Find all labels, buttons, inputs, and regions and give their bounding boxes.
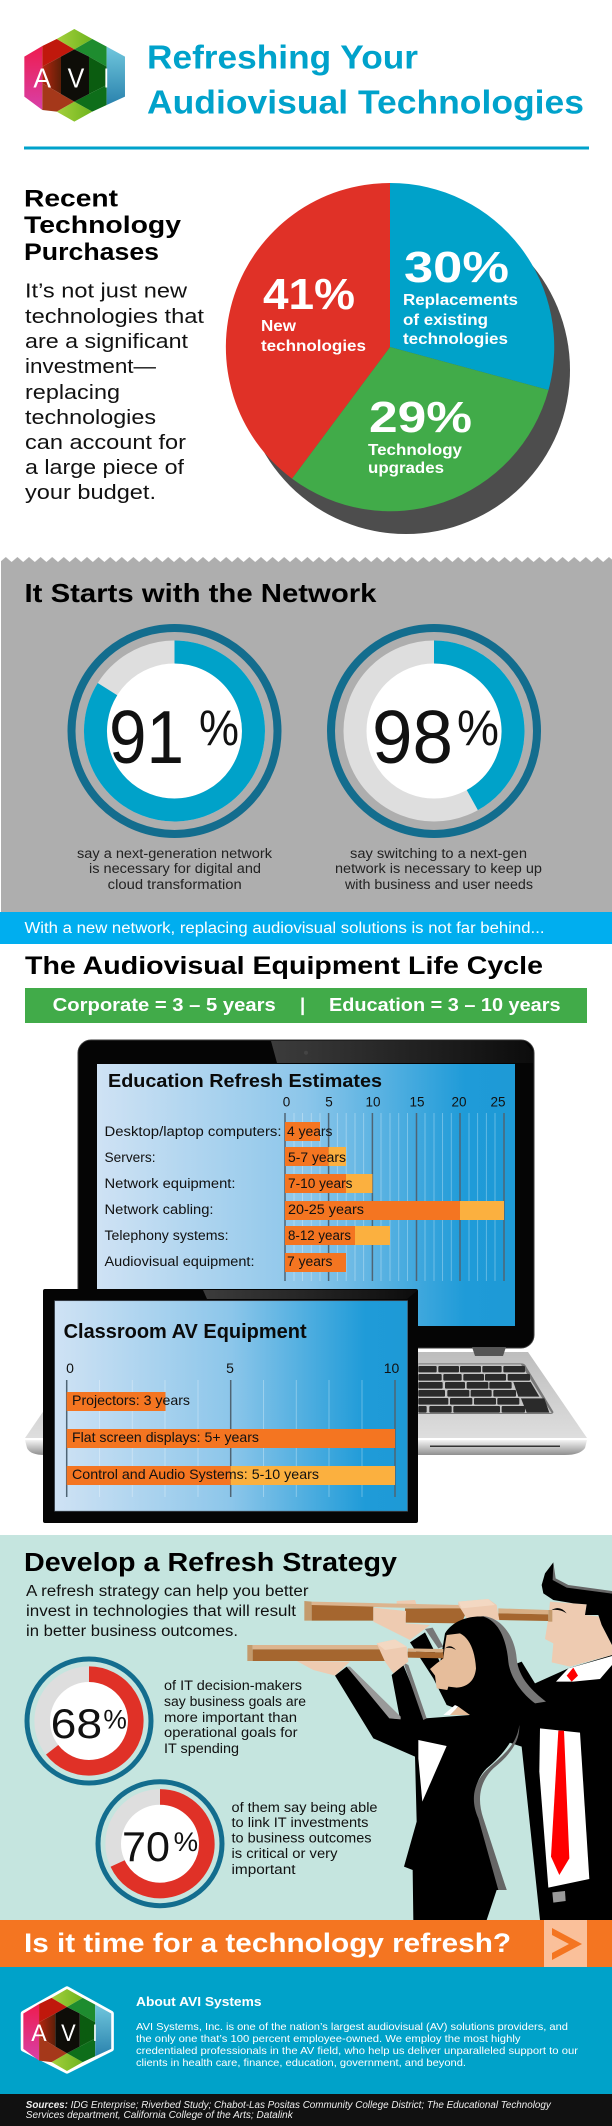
pie label: 29%: Technology bbox=[368, 442, 462, 459]
pie label: 30%: Replacements bbox=[403, 292, 518, 309]
life cycle bar: Corporate = 3 – 5 years bbox=[53, 994, 276, 1015]
text: 68%: more important than bbox=[164, 1710, 297, 1725]
chart bar labels bbox=[72, 1392, 319, 1482]
lower telescope bbox=[247, 1639, 443, 1676]
caption: 91%: say a next-generation network bbox=[77, 846, 272, 861]
chart row labels: Network cabling: bbox=[104, 1202, 214, 1217]
text: 68%: operational goals for bbox=[164, 1725, 298, 1740]
about text: credentialed professionals in the AV field, who help us deliver unparalleled support to our bbox=[136, 2045, 579, 2057]
chart bars bbox=[285, 1122, 504, 1272]
pie label: 30%: technologies bbox=[403, 331, 508, 348]
logo: AVI hexagon with white outline: A bbox=[31, 2020, 47, 2047]
caption: 98% bbox=[335, 846, 542, 892]
chart axis: 0 bbox=[283, 1094, 290, 1110]
about text: the only one that’s 100 percent employee-owned. We employ the most highly bbox=[136, 2033, 521, 2045]
text: 70%: to link IT investments bbox=[232, 1815, 369, 1830]
title bbox=[147, 40, 584, 122]
text: 68%: say business goals are bbox=[164, 1694, 306, 1709]
text: 70%: is critical or very bbox=[232, 1846, 338, 1861]
chart row labels: Network equipment: bbox=[104, 1176, 236, 1191]
tablet bbox=[43, 1289, 418, 1523]
tablet screen bbox=[55, 1301, 408, 1511]
chart axis: 10 bbox=[365, 1094, 381, 1110]
text block: are a significant bbox=[25, 331, 189, 353]
text block: invest in technologies that will result bbox=[26, 1603, 297, 1620]
life cycle bar bbox=[25, 988, 587, 1023]
arrow button bbox=[544, 1920, 587, 1967]
text: 70%: important bbox=[232, 1862, 296, 1877]
heading bbox=[24, 186, 182, 266]
chart axis: 25 bbox=[490, 1094, 506, 1110]
header bbox=[24, 29, 584, 122]
chart axis: 5 bbox=[226, 1360, 234, 1376]
pie label: 29%: 29% bbox=[369, 393, 472, 442]
chart row labels: Servers: bbox=[104, 1150, 156, 1165]
caption: 91%: cloud transformation bbox=[108, 877, 242, 892]
chart axis bbox=[283, 1094, 506, 1110]
donut chart: 91%: % bbox=[199, 700, 239, 756]
heading: It Starts with the Network bbox=[24, 578, 377, 608]
laptop screen bbox=[97, 1064, 515, 1326]
panel: develop a refresh strategy bbox=[0, 1535, 612, 1920]
title: Refreshing Your bbox=[147, 40, 418, 76]
banner: new network bbox=[0, 912, 612, 944]
donut chart: 98% bbox=[331, 628, 537, 834]
text block: in better business outcomes. bbox=[26, 1623, 238, 1640]
heading: Purchases bbox=[24, 239, 159, 266]
donut chart: 68% bbox=[27, 1659, 151, 1783]
text: 68%: IT spending bbox=[164, 1741, 239, 1756]
chart row labels: Desktop/laptop computers: bbox=[104, 1124, 282, 1139]
call to action banner bbox=[0, 1920, 612, 1967]
text block: technologies that bbox=[25, 306, 205, 328]
upper telescope bbox=[304, 1599, 552, 1640]
title: Audiovisual Technologies bbox=[147, 84, 584, 122]
caption: 91% bbox=[77, 846, 272, 892]
heading: Recent bbox=[24, 186, 118, 212]
keyboard bbox=[418, 1363, 553, 1414]
chart axis: 0 bbox=[66, 1360, 74, 1376]
chart title: Classroom AV Equipment bbox=[64, 1321, 307, 1343]
text block: technologies bbox=[25, 407, 156, 429]
man bbox=[410, 1562, 612, 1920]
chart row labels: Audiovisual equipment: bbox=[104, 1254, 254, 1269]
about text bbox=[136, 2021, 579, 2069]
laptop lid bbox=[78, 1040, 534, 1348]
life cycle bar: | bbox=[300, 994, 305, 1015]
pie label: 41%: New bbox=[261, 318, 297, 335]
about heading: About AVI Systems bbox=[136, 1994, 262, 2009]
life cycle bar: Education = 3 – 10 years bbox=[329, 994, 560, 1015]
laptop bbox=[25, 1040, 587, 1455]
logo: AVI hexagon bbox=[24, 29, 125, 122]
chart bar labels: Projectors: 3 years bbox=[72, 1392, 190, 1408]
about text: clients in health care, finance, education, government, and beyond. bbox=[136, 2057, 466, 2069]
text: 70%: to business outcomes bbox=[232, 1830, 372, 1846]
text: 70% bbox=[232, 1800, 378, 1877]
pie label: 30%: of existing bbox=[403, 312, 488, 329]
chart row labels: 8-12 years bbox=[288, 1228, 351, 1243]
pie label: 41% bbox=[261, 270, 366, 355]
logo: AVI hexagon: I bbox=[104, 63, 109, 94]
pie label: 41%: 41% bbox=[263, 270, 355, 319]
chart axis bbox=[66, 1360, 399, 1376]
about text: AVI Systems, Inc. is one of the nation’s largest audiovisual (AV) solutions providers, and bbox=[136, 2021, 568, 2033]
logo: AVI hexagon with white outline: I bbox=[93, 2020, 97, 2047]
sources bar bbox=[0, 2094, 612, 2126]
caption: 98%: network is necessary to keep up bbox=[335, 861, 542, 876]
text block: a large piece of bbox=[25, 457, 185, 479]
chart row labels: 7 years bbox=[287, 1254, 333, 1269]
text block: can account for bbox=[25, 432, 186, 454]
pie label: 30% bbox=[403, 243, 518, 348]
donut chart: 98%: % bbox=[457, 700, 499, 756]
logo: AVI hexagon with white outline: V bbox=[61, 2020, 76, 2047]
text block: your budget. bbox=[25, 482, 156, 504]
text: 68%: of IT decision-makers bbox=[164, 1678, 302, 1693]
donut chart: 91% bbox=[72, 628, 278, 834]
call to action banner: Is it time for a technology refresh? bbox=[24, 1928, 511, 1958]
woman bbox=[335, 1616, 546, 1920]
chart bars bbox=[67, 1392, 395, 1485]
caption: 98%: with business and user needs bbox=[344, 877, 533, 892]
illustration: businesspeople with telescopes bbox=[247, 1562, 612, 1920]
chart: education refresh estimates bbox=[104, 1071, 506, 1281]
text: 68% bbox=[164, 1678, 306, 1756]
donut chart: 70%: 70 bbox=[122, 1823, 170, 1870]
panel: it starts with the network bbox=[1, 557, 612, 912]
heading: life cycle: The Audiovisual Equipment Life Cycle bbox=[25, 952, 543, 980]
banner: new network: With a new network, replacing audiovisual solutions is not far behind... bbox=[24, 920, 544, 937]
sources bar: Sources: IDG Enterprise; Riverbed Study; Chabot-Las Positas Community College District; The Educational Technology bbox=[26, 2100, 552, 2111]
caption: 98%: say switching to a next-gen bbox=[350, 846, 527, 861]
chart axis: 15 bbox=[409, 1094, 425, 1110]
donut chart: 70% bbox=[98, 1782, 222, 1906]
heading: Technology bbox=[24, 212, 182, 239]
heading: Develop a Refresh Strategy bbox=[24, 1549, 398, 1577]
text block bbox=[25, 280, 205, 504]
chart row labels: 7-10 years bbox=[288, 1176, 353, 1191]
chart row labels bbox=[104, 1124, 364, 1269]
text block: It’s not just new bbox=[25, 280, 188, 302]
chart bar labels: Flat screen displays: 5+ years bbox=[72, 1429, 259, 1445]
footer: about AVI systems bbox=[0, 1967, 612, 2094]
panel: recent technology purchases bbox=[24, 183, 570, 534]
chart axis: 20 bbox=[451, 1094, 467, 1110]
text block: investment— bbox=[25, 356, 156, 378]
text block: replacing bbox=[25, 382, 120, 404]
pie label: 29%: upgrades bbox=[368, 460, 444, 477]
chart row labels: Telephony systems: bbox=[104, 1228, 228, 1243]
caption: 91%: is necessary for digital and bbox=[89, 861, 261, 876]
chart: classroom AV equipment bbox=[64, 1321, 399, 1497]
logo: AVI hexagon: A bbox=[33, 63, 52, 94]
chart axis: 10 bbox=[384, 1360, 399, 1376]
logo: AVI hexagon: V bbox=[68, 63, 85, 94]
text: 70%: of them say being able bbox=[232, 1800, 378, 1815]
pie label: 30%: 30% bbox=[404, 243, 509, 292]
pie chart bbox=[226, 183, 570, 534]
donut chart: 70%: % bbox=[174, 1827, 198, 1857]
pie label: 41%: technologies bbox=[261, 338, 366, 355]
chart title: Education Refresh Estimates bbox=[108, 1071, 382, 1091]
chart axis: 5 bbox=[325, 1094, 333, 1110]
logo: AVI hexagon with white outline bbox=[23, 1989, 111, 2071]
chart row labels: 20-25 years bbox=[288, 1202, 364, 1217]
chart row labels: 4 years bbox=[287, 1124, 333, 1139]
laptop base bbox=[25, 1352, 587, 1455]
chart row labels: 5-7 years bbox=[288, 1150, 346, 1165]
text block bbox=[26, 1583, 308, 1640]
donut chart: 68%: 68 bbox=[51, 1700, 102, 1747]
donut chart: 68%: % bbox=[103, 1704, 127, 1734]
chart bar labels: Control and Audio Systems: 5-10 years bbox=[72, 1466, 319, 1482]
donut chart: 98%: 98 bbox=[372, 695, 453, 779]
sources bar: Services department, California College of the Arts; Datalink bbox=[26, 2110, 294, 2121]
pie label: 29% bbox=[368, 393, 472, 477]
donut chart: 91%: 91 bbox=[109, 695, 184, 779]
text block: A refresh strategy can help you better bbox=[26, 1583, 308, 1600]
